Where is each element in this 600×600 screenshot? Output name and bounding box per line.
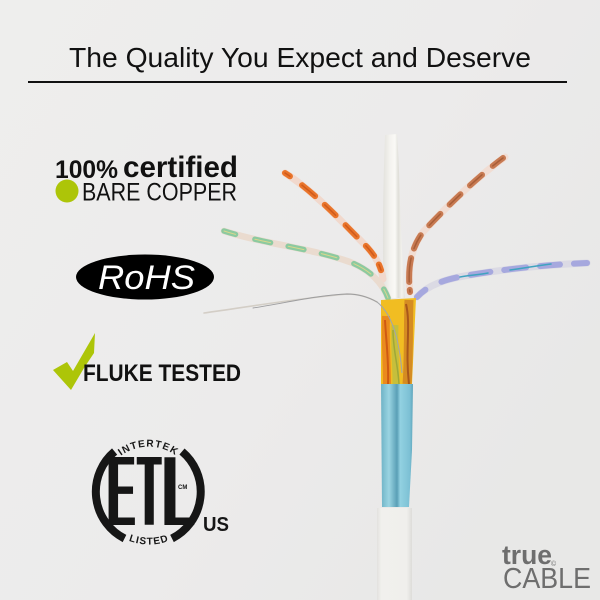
ETL letters: L [163, 436, 193, 546]
blue foil section [381, 384, 413, 507]
trueCABLE logo: true [502, 540, 552, 570]
ETL letters: E [108, 436, 134, 546]
wire pair: orange [285, 173, 383, 279]
cable photo [204, 134, 587, 600]
right ring arc [172, 452, 201, 538]
heading: certified: certified [123, 151, 238, 184]
wire pair: blue [417, 263, 587, 297]
US mark: US [203, 514, 229, 536]
ring text: intertek: INTERTEK [118, 440, 178, 456]
heading: 100%: 100% [55, 156, 118, 184]
icon: green dot [56, 180, 78, 202]
yellow foil section [381, 298, 416, 384]
white filler [383, 134, 405, 298]
RoHS badge [76, 254, 214, 300]
wire pair: green [224, 231, 388, 298]
RoHS badge: RoHS [98, 259, 195, 297]
text: bare copper: BARE COPPER [82, 178, 237, 206]
trueCABLE logo [502, 540, 591, 595]
ring text: listed: LISTED [129, 534, 168, 545]
drain wire over foil [377, 302, 402, 373]
thin drain wire [204, 294, 377, 313]
trueCABLE logo: © [551, 560, 557, 568]
wire pair: brown [409, 157, 505, 292]
ETL listed logo [92, 436, 229, 546]
icon: green check mark [53, 333, 95, 390]
title: The Quality You Expect and Deserve [69, 42, 531, 73]
trueCABLE logo: CABLE [503, 563, 591, 595]
fluke tested label: FLUKE TESTED [83, 360, 241, 387]
certified copper label [55, 151, 238, 206]
left ring arc [96, 452, 124, 538]
certification mark: CM [178, 485, 187, 491]
ETL letters: T [139, 436, 160, 546]
white outer jacket [377, 508, 412, 600]
title underline [28, 81, 567, 83]
fluke tested label [53, 333, 241, 390]
